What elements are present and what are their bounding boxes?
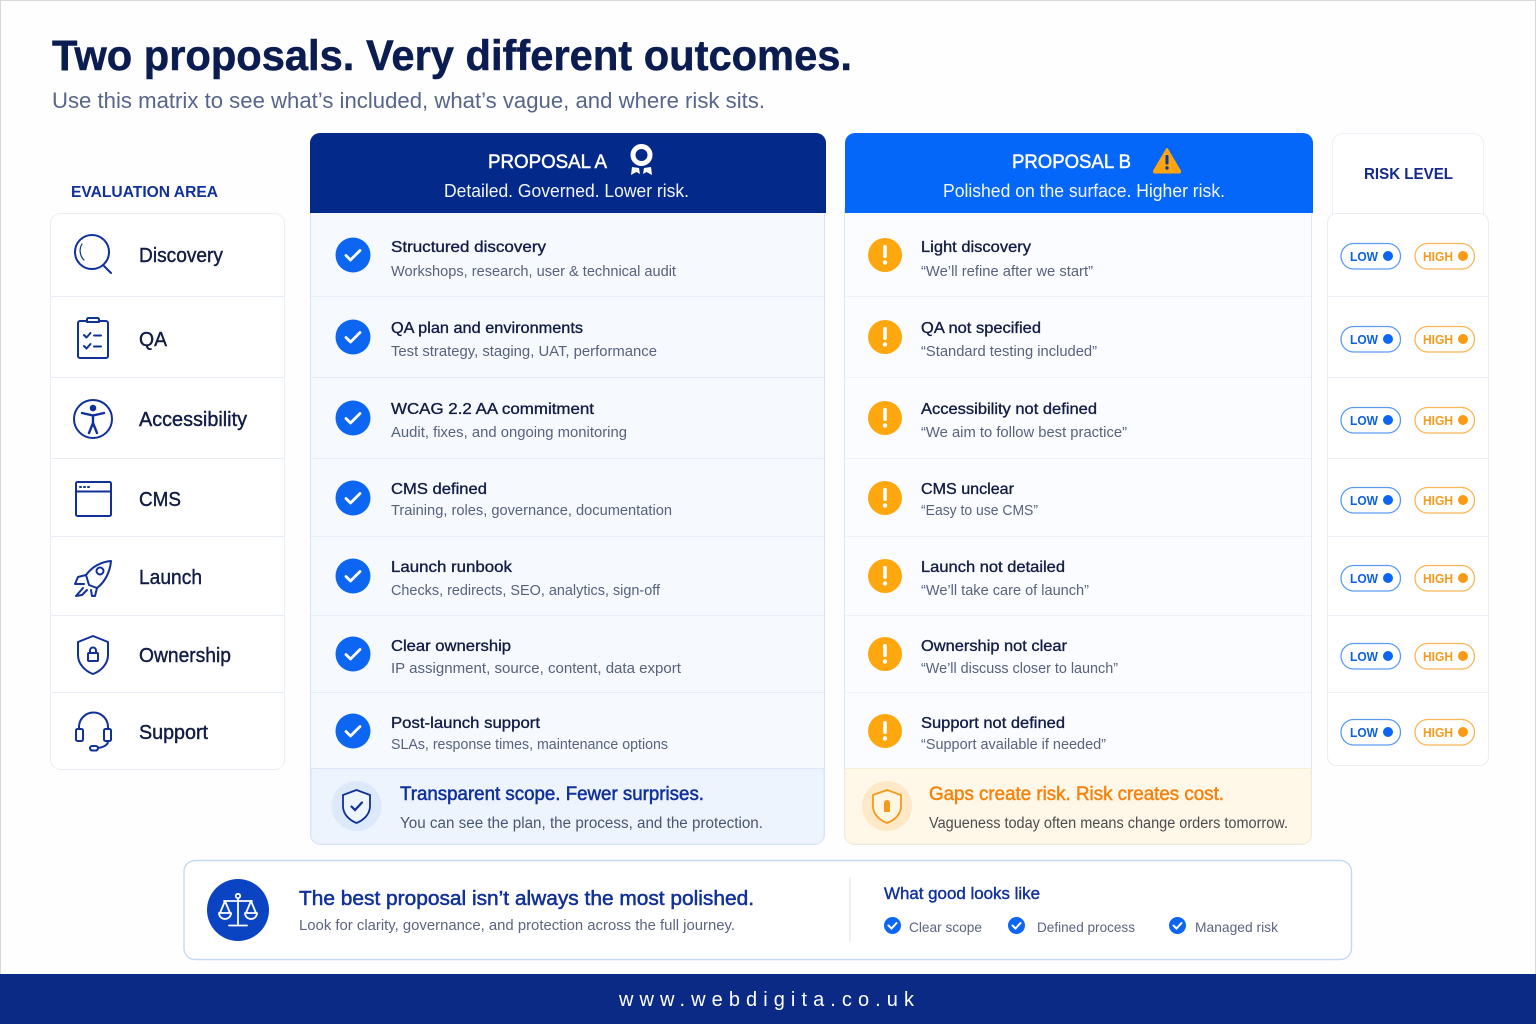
- item: light discovery: Light discovery: [921, 239, 1031, 256]
- what good looks like: What good looks like: [884, 884, 1040, 903]
- icon: amber shield: [862, 781, 912, 831]
- item: accessibility not defined: “We aim to follow best practice”: [921, 425, 1127, 441]
- proposal B header: Polished on the surface. Higher risk.: [943, 181, 1225, 201]
- panel: risk level: [1328, 134, 1488, 766]
- risk pills row 2: LOW: [1350, 332, 1379, 347]
- item: QA plan: QA plan and environments: [391, 320, 583, 337]
- item: CMS defined: CMS defined: [391, 481, 487, 498]
- row: accessibility: [74, 400, 247, 438]
- item: clear ownership: [336, 636, 681, 677]
- check: managed risk: [1169, 917, 1279, 935]
- icon: balance scales: [207, 879, 269, 941]
- icon: shield lock: [78, 636, 108, 674]
- callout: gaps create risk: Gaps create risk. Risk creates cost.: [929, 784, 1224, 805]
- proposal B header: [845, 133, 1313, 213]
- risk pills row 3: HIGH: [1423, 413, 1453, 428]
- item: accessibility not defined: Accessibility not defined: [921, 401, 1097, 418]
- callout: transparent scope: Transparent scope. Fewer surprises.: [400, 784, 704, 805]
- what good looks like: [884, 884, 1279, 935]
- icon: accessibility: [74, 400, 112, 438]
- proposal A header: [310, 133, 826, 213]
- row: QA: [78, 318, 168, 358]
- risk pills row 1: HIGH: [1423, 249, 1453, 264]
- item: WCAG: [336, 400, 627, 441]
- row: support: Support: [139, 722, 208, 744]
- item: post-launch support: [336, 714, 668, 753]
- item: clear ownership: Clear ownership: [391, 638, 511, 655]
- risk pills row 6: HIGH: [1423, 649, 1453, 664]
- item: ownership not clear: [868, 637, 1118, 677]
- item: structured discovery: Workshops, research, user & technical audit: [391, 264, 676, 280]
- panel: takeaway: Look for clarity, governance, and protection across the full journey.: [299, 917, 735, 934]
- item: support not defined: [868, 714, 1106, 753]
- risk pills row 6: [1341, 644, 1474, 669]
- check: defined process: [1008, 917, 1135, 935]
- item: QA plan: Test strategy, staging, UAT, performance: [391, 344, 657, 360]
- item: launch not detailed: Launch not detailed: [921, 559, 1065, 576]
- item: structured discovery: Structured discovery: [391, 239, 546, 256]
- panel: evaluation area: [50, 184, 284, 770]
- proposal A header: PROPOSAL A: [488, 151, 607, 173]
- row: CMS: [76, 482, 181, 516]
- check: clear scope: [884, 917, 982, 935]
- row: discovery: Discovery: [139, 245, 223, 267]
- item: CMS unclear: “Easy to use CMS”: [921, 503, 1038, 519]
- item: light discovery: “We’ll refine after we start”: [921, 264, 1093, 280]
- risk pills row 5: LOW: [1350, 571, 1379, 586]
- item: CMS defined: [336, 480, 672, 519]
- check: defined process: Defined process: [1037, 919, 1135, 935]
- row: ownership: [78, 636, 231, 674]
- row: accessibility: Accessibility: [139, 409, 247, 431]
- icon: rocket: [75, 561, 111, 596]
- risk pills row 3: [1341, 408, 1474, 433]
- risk pills row 1: LOW: [1350, 249, 1379, 264]
- callout: gaps create risk: [845, 768, 1311, 844]
- row: QA: QA: [139, 329, 168, 351]
- risk pills row 7: [1341, 720, 1474, 745]
- item: QA not specified: [868, 320, 1097, 360]
- item: WCAG: WCAG 2.2 AA commitment: [391, 401, 595, 418]
- row: CMS: CMS: [139, 489, 181, 511]
- item: light discovery: [868, 238, 1093, 280]
- risk pills row 2: [1341, 326, 1474, 352]
- item: accessibility not defined: [868, 401, 1127, 441]
- item: support not defined: Support not defined: [921, 715, 1065, 732]
- item: launch not detailed: [868, 559, 1089, 599]
- panel: takeaway: [184, 860, 1352, 960]
- risk pills row 5: HIGH: [1423, 571, 1453, 586]
- item: CMS unclear: [868, 481, 1038, 519]
- row: launch: Launch: [139, 567, 202, 589]
- risk level header: [1332, 134, 1484, 224]
- item: post-launch support: SLAs, response times, maintenance options: [391, 737, 668, 753]
- row: discovery: [75, 235, 223, 273]
- item: CMS defined: Training, roles, governance, documentation: [391, 503, 672, 519]
- risk pills row 4: [1341, 488, 1474, 513]
- risk pills row 2: HIGH: [1423, 332, 1453, 347]
- item: clear ownership: IP assignment, source, content, data export: [391, 661, 681, 677]
- item: post-launch support: Post-launch support: [391, 715, 541, 732]
- risk pills row 6: LOW: [1350, 649, 1379, 664]
- item: QA plan: [336, 320, 657, 360]
- callout: transparent scope: [311, 768, 824, 844]
- item: support not defined: “Support available if needed”: [921, 737, 1106, 753]
- item: ownership not clear: Ownership not clear: [921, 638, 1068, 655]
- check: managed risk: Managed risk: [1195, 919, 1279, 935]
- panel: proposal B: [844, 133, 1313, 844]
- item: QA not specified: QA not specified: [921, 320, 1041, 337]
- item: structured discovery: [336, 238, 676, 280]
- title: Two proposals. Very different outcomes.: [52, 32, 852, 80]
- callout: transparent scope: You can see the plan, the process, and the protection.: [400, 815, 763, 832]
- item: QA not specified: “Standard testing included”: [921, 344, 1097, 360]
- risk pills row 5: [1341, 566, 1474, 591]
- icon: shield check: [332, 781, 382, 831]
- row: support: [76, 712, 208, 750]
- item: launch runbook: [336, 558, 661, 599]
- risk pills row 4: LOW: [1350, 493, 1379, 508]
- item: launch not detailed: “We’ll take care of launch”: [921, 583, 1089, 599]
- footer band: www.webdigita.co.uk: [618, 989, 915, 1011]
- icon: headset: [76, 712, 111, 750]
- footer band: [0, 974, 1536, 1024]
- callout: gaps create risk: Vagueness today often means change orders tomorrow.: [929, 815, 1288, 832]
- item: CMS unclear: CMS unclear: [921, 481, 1015, 498]
- item: launch runbook: Launch runbook: [391, 559, 513, 576]
- risk pills row 1: [1341, 244, 1474, 269]
- icon: browser window: [76, 482, 111, 516]
- heading: evaluation area: EVALUATION AREA: [71, 184, 218, 201]
- panel: proposal A: [310, 133, 826, 844]
- check: clear scope: Clear scope: [909, 919, 982, 935]
- subtitle: Use this matrix to see what’s included, what’s vague, and where risk sits.: [52, 88, 765, 113]
- panel: takeaway: The best proposal isn’t always the most polished.: [299, 888, 754, 910]
- proposal B header: PROPOSAL B: [1012, 151, 1131, 173]
- row: launch: [75, 561, 202, 596]
- row: ownership: Ownership: [139, 645, 231, 667]
- icon: magnifier: [75, 235, 111, 273]
- risk pills row 7: HIGH: [1423, 725, 1453, 740]
- risk level header: RISK LEVEL: [1364, 166, 1453, 183]
- proposal A header: Detailed. Governed. Lower risk.: [444, 181, 689, 201]
- item: launch runbook: Checks, redirects, SEO, analytics, sign-off: [391, 583, 661, 599]
- icon: clipboard: [78, 318, 108, 358]
- item: ownership not clear: “We’ll discuss closer to launch”: [921, 661, 1118, 677]
- risk pills row 7: LOW: [1350, 725, 1379, 740]
- icon: award ribbon: [631, 146, 652, 175]
- icon: warning triangle: [1154, 149, 1180, 173]
- risk pills row 3: LOW: [1350, 413, 1379, 428]
- item: WCAG: Audit, fixes, and ongoing monitoring: [391, 425, 627, 441]
- risk pills row 4: HIGH: [1423, 493, 1453, 508]
